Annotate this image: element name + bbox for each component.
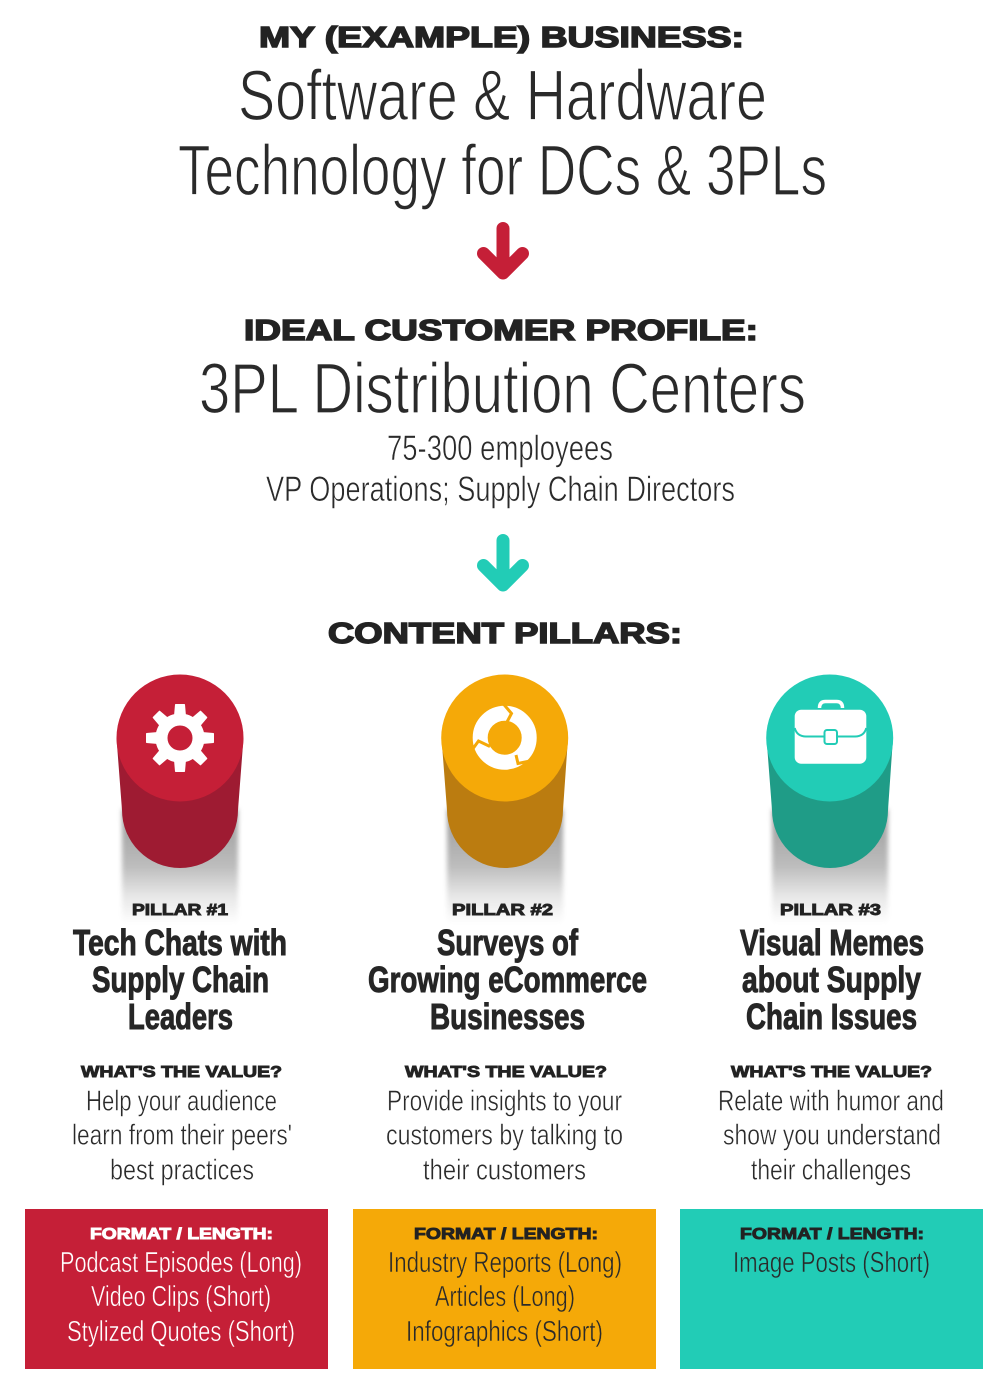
pillar 1 format box: Video Clips (Short) <box>91 1281 271 1313</box>
pillar 3 value: Relate with humor and <box>718 1086 944 1118</box>
icon: briefcase <box>795 702 866 764</box>
title: software and hardware technology <box>178 57 827 211</box>
pillar 1 title <box>73 922 287 1037</box>
pillar 2 title: Surveys of <box>437 922 579 963</box>
pillar 1 <box>25 674 328 1369</box>
pillar 1 value: best practices <box>110 1154 254 1186</box>
pillar 3 format box <box>680 1209 983 1369</box>
pillar 1 value <box>72 1064 292 1186</box>
label: pillar 3: PILLAR #3 <box>780 902 881 919</box>
icon: gear <box>146 704 214 772</box>
label: pillar 2: PILLAR #2 <box>452 902 553 919</box>
pillar 2 value: WHAT'S THE VALUE? <box>405 1064 607 1081</box>
pillar 2 title <box>368 922 647 1037</box>
heading: content pillars: CONTENT PILLARS: <box>328 618 682 650</box>
pillar 2 value: Provide insights to your <box>387 1086 622 1118</box>
pillar 2 value: their customers <box>423 1154 586 1186</box>
section: ideal customer profile <box>199 315 806 509</box>
pillar 2 format box: FORMAT / LENGTH: <box>414 1226 598 1243</box>
pillar 1 format box: Podcast Episodes (Long) <box>60 1247 302 1279</box>
title: software and hardware technology: Software & Hardware <box>238 57 767 136</box>
arrow: teal down <box>484 540 522 585</box>
heading: ideal customer profile: IDEAL CUSTOMER PROFILE: <box>244 315 758 347</box>
text: customer details <box>266 429 735 509</box>
pillar 2 format box: Articles (Long) <box>435 1281 575 1313</box>
text: customer details: 75-300 employees <box>387 429 613 468</box>
section: business <box>178 22 827 211</box>
pillar 1 title: Leaders <box>128 996 233 1037</box>
pillar 2 title: Businesses <box>430 996 585 1037</box>
pillar 1 title: Supply Chain <box>92 959 269 1000</box>
pillar 2 format box <box>353 1209 656 1369</box>
pillar 3 format box: FORMAT / LENGTH: <box>740 1226 924 1243</box>
arrow: red down <box>484 228 522 273</box>
pillar 2 format box: Infographics (Short) <box>406 1316 603 1348</box>
label: pillar 1: PILLAR #1 <box>132 902 228 919</box>
pillar 3 title: Chain Issues <box>746 996 917 1037</box>
pillar 2 value <box>386 1064 623 1186</box>
pillar 1 format box <box>25 1209 328 1369</box>
cylinder: red with gear icon <box>116 674 244 924</box>
pillar 3 title: Visual Memes <box>740 922 924 963</box>
pillar 3 value: WHAT'S THE VALUE? <box>731 1064 932 1081</box>
pillar 1 value: Help your audience <box>86 1086 277 1118</box>
pillar 2 value: customers by talking to <box>386 1120 623 1152</box>
title: 3PL distribution centers: 3PL Distribution Centers <box>199 350 806 429</box>
cylinder: teal with briefcase icon <box>766 674 893 924</box>
pillar 2 format box: Industry Reports (Long) <box>388 1247 622 1279</box>
pillar 3 title: about Supply <box>742 959 921 1000</box>
cylinder: orange with cycle icon <box>441 674 568 924</box>
heading: my example business: MY (EXAMPLE) BUSINESS: <box>259 22 744 54</box>
text: customer details: VP Operations; Supply Chain Directors <box>266 470 735 509</box>
pillar 1 title: Tech Chats with <box>73 922 287 963</box>
pillar 2 title: Growing eCommerce <box>368 959 647 1000</box>
pillar 1 format box: FORMAT / LENGTH: <box>90 1226 273 1243</box>
pillar 1 value: learn from their peers' <box>72 1120 292 1152</box>
pillar 3 value: show you understand <box>723 1120 941 1152</box>
pillar 1 format box: Stylized Quotes (Short) <box>67 1316 295 1348</box>
pillar 3 value: their challenges <box>751 1154 911 1186</box>
pillar 1 value: WHAT'S THE VALUE? <box>81 1064 282 1081</box>
icon: cycle arrows <box>472 704 530 764</box>
pillar 3 value <box>718 1064 944 1186</box>
pillar 3 title <box>740 922 924 1037</box>
pillar 3 <box>680 674 983 1369</box>
pillar 3 format box: Image Posts (Short) <box>733 1247 930 1279</box>
pillar 2 <box>353 674 656 1369</box>
